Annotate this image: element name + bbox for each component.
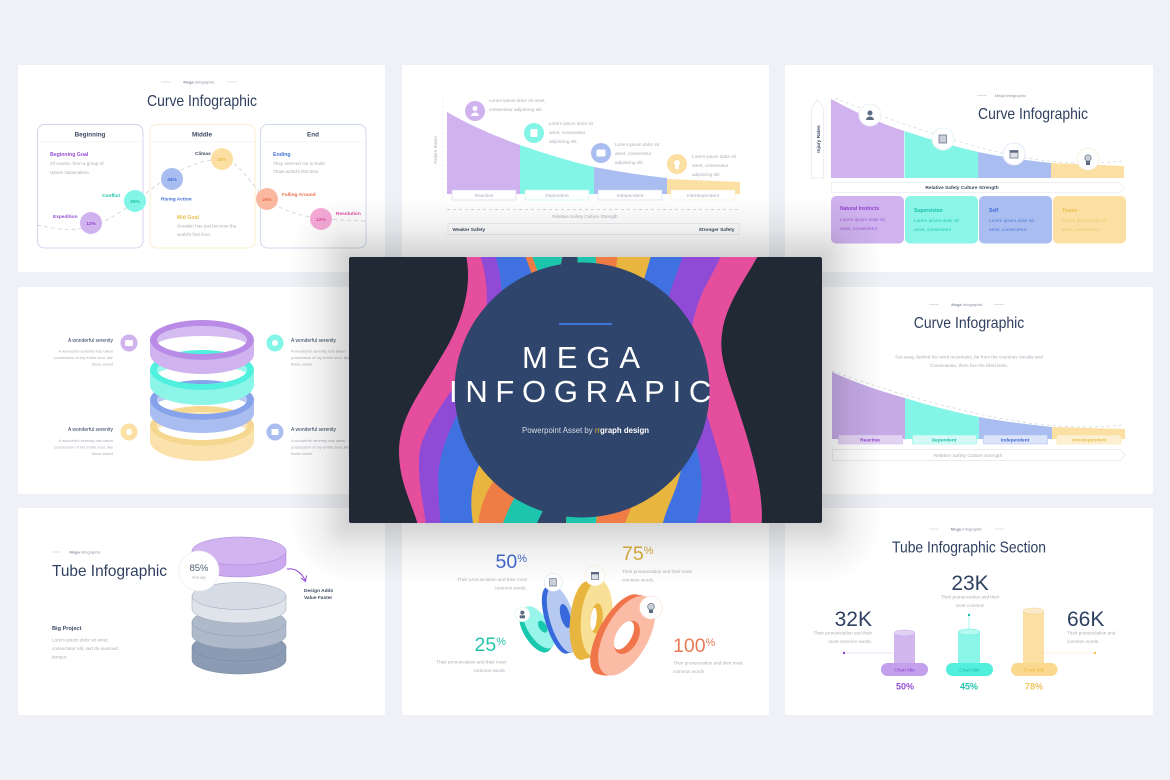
subtitle: Powerpoint Asset by rrgraph design <box>522 426 649 435</box>
pill: purple chart title: Chart title <box>894 668 915 674</box>
dashed trend line <box>832 371 1122 427</box>
curve node: expedition <box>53 212 102 234</box>
stage box: middle: Sondein has just become the <box>177 224 237 228</box>
disk: slate top <box>192 582 286 623</box>
curve node: conflict: Conflict <box>102 193 120 199</box>
disk: slate middle <box>192 608 286 649</box>
stat: 50 percent: common words. <box>495 586 527 590</box>
callout: 85 percent <box>179 551 219 591</box>
card: supervision: Supervision <box>914 208 943 214</box>
curve node: rising action <box>161 168 192 202</box>
y axis <box>433 97 443 198</box>
icon: person <box>465 101 485 121</box>
callout: top right: A wonderful serenity <box>291 338 337 344</box>
callout texts: amet, consectetur <box>615 151 652 156</box>
percentages: 78% <box>1025 682 1043 692</box>
callout: top right: A wonderful serenity has taken <box>291 348 345 354</box>
flowing color ribbons <box>399 257 762 523</box>
area segments <box>832 372 1125 439</box>
text block: big project <box>52 626 118 660</box>
stage box: beginning: Ubiom Nationalism. <box>50 170 90 175</box>
callout texts: adipiscing elit. <box>692 172 721 177</box>
card: natural instincts: Natural Instincts <box>840 206 879 212</box>
curve node: falling around: 26% <box>262 197 273 203</box>
icon: calendar <box>1003 143 1025 165</box>
heading: INFOGRAPIC <box>449 374 719 409</box>
disk: slate bottom <box>192 633 286 674</box>
heading: MEGA <box>522 340 649 375</box>
stage box: end: Ending <box>273 152 291 158</box>
icon: document badge <box>544 573 562 591</box>
card: natural instincts: Lorem ipsum dolor sit <box>840 217 886 222</box>
icon: calendar badge <box>585 566 605 586</box>
stat: 66K <box>1067 608 1116 644</box>
title: Curve Infographic <box>147 93 257 110</box>
eyebrow label: Mega Infographic <box>995 93 1026 98</box>
callout: bottom left <box>54 424 138 456</box>
stat: 50 percent <box>457 551 528 590</box>
title: Curve Infographic <box>978 106 1088 123</box>
callout: top right: these sweet <box>291 362 313 366</box>
stat: 66K: Their pronunciation and <box>1067 630 1116 636</box>
stage labels <box>452 190 735 200</box>
percentages: 45% <box>960 682 978 692</box>
stage labels: Independent <box>1001 438 1030 444</box>
tube: purple <box>894 630 915 664</box>
curve node: resolution <box>310 208 361 230</box>
eyebrow label: Mega Infographic <box>70 550 101 554</box>
stat: 66K: 66K <box>1067 608 1104 631</box>
stage box: beginning: Of course, from a group of <box>50 161 104 166</box>
arrow: purple curved <box>287 569 306 582</box>
curve node: conflict: 25% <box>130 199 141 205</box>
stage labels: Independent <box>617 193 644 199</box>
eyebrow label <box>52 550 101 554</box>
curve node: expedition: 12% <box>86 221 97 227</box>
description: Far away, behind the word mountains, far from the countries Vocalia and <box>895 354 1043 360</box>
eyebrow label <box>929 526 1004 532</box>
disc: orange 100 percent <box>579 586 667 685</box>
callout: top left: possession of my entire soul, like <box>54 355 114 360</box>
card: supervision <box>905 196 978 244</box>
label: design adds value faster <box>304 588 333 601</box>
callout: 85 percent: 85% <box>189 563 209 574</box>
callout texts: Lorem ipsum dolor sit amet, <box>489 98 546 103</box>
stat: 75 percent: % <box>644 545 654 557</box>
text block: big project: Lorem ipsum dolor sit amet, <box>52 638 109 642</box>
curve node: climax: Climax <box>195 151 211 157</box>
weaker to stronger scale: Weaker Safety <box>452 227 486 233</box>
stage box: middle <box>150 124 255 248</box>
stat: 23K <box>941 572 1000 608</box>
stat: 50 percent: Their pronunciation and their most <box>457 577 528 582</box>
stat: 25 percent: % <box>496 636 506 648</box>
card: natural instincts <box>831 196 904 244</box>
callout: top right <box>266 334 350 366</box>
weaker to stronger scale <box>448 224 739 234</box>
card: supervision: amet, consectetur <box>914 227 952 232</box>
card: self <box>979 196 1052 244</box>
stage box: end: End <box>307 132 319 138</box>
stat: 25 percent: Their pronunciation and their most <box>436 660 507 664</box>
curve node: climax: 38% <box>217 157 228 163</box>
curve node: resolution: Resolution <box>336 211 361 217</box>
panel: curve infographic with cards <box>785 65 1153 272</box>
callout texts: Lorem ipsum dolor sit <box>692 154 737 159</box>
tube: cyan <box>958 629 980 664</box>
curve node: falling around: Falling Around <box>282 192 316 198</box>
stage labels: Dependent <box>932 438 957 444</box>
panel: stacked rings <box>18 287 385 494</box>
callout: bottom right: possession of my entire soul, like <box>291 444 350 450</box>
stage box: middle: world's first time. <box>177 232 211 237</box>
label: design adds value faster: Design Adds <box>304 588 333 594</box>
callout: bottom left: these sweet <box>92 451 114 456</box>
stat: 100 percent: common words. <box>673 669 705 674</box>
ring: cyan <box>150 350 254 405</box>
stage box: end <box>260 124 366 248</box>
curve node: rising action: 44% <box>167 177 178 183</box>
x axis arrow: Relative Safety Culture Strength <box>552 214 618 219</box>
eyebrow label: Mega Infographic <box>951 302 983 307</box>
icon: calendar <box>591 143 611 163</box>
callout: bottom right: A wonderful serenity <box>291 427 337 433</box>
disc: yellow 75 percent <box>567 578 616 661</box>
ring: purple <box>150 320 254 374</box>
stage box: beginning <box>38 124 143 248</box>
eyebrow label <box>929 302 1004 307</box>
arrow bar <box>832 450 1125 460</box>
arrow bar: Relative Safety Culture Strength <box>934 453 1003 459</box>
stage labels: Reactive <box>475 193 494 199</box>
stage labels <box>838 435 1121 444</box>
text block: big project: tempor. <box>52 654 67 660</box>
dashed story curve <box>37 159 366 229</box>
callout: top left <box>54 334 138 366</box>
stage box: end: They seemed me to build <box>273 161 325 166</box>
accent line <box>559 323 612 325</box>
title: Curve Infographic <box>914 315 1024 332</box>
icon: person <box>859 104 881 126</box>
panel: tube infographic section <box>785 508 1153 715</box>
stat: 32K: Their pronunciation and their <box>814 630 872 636</box>
callout texts: Lorem ipsum dolor sit <box>549 121 594 126</box>
stat: 50 percent: % <box>517 553 527 565</box>
stage box: middle: Mid Goal <box>177 215 199 221</box>
description <box>895 354 1043 368</box>
stat: 25 percent: common words. <box>474 668 506 673</box>
stage labels: Dependent <box>545 193 569 199</box>
weaker to stronger scale: Stronger Safety <box>699 227 735 233</box>
panel: injury rates area chart <box>402 65 769 272</box>
title: Tube Infographic Section <box>892 540 1046 556</box>
vertical arrow label <box>812 100 824 178</box>
stat: 100 percent: % <box>706 637 716 649</box>
stat: 25 percent: 25 <box>475 634 496 656</box>
callout texts: adipiscing elit. <box>615 160 644 165</box>
pill: cyan chart title <box>946 663 993 676</box>
y axis: Failure Rates <box>433 136 438 164</box>
panel: curve infographic with labels <box>785 287 1153 494</box>
card: supervision: Lorem ipsum dolor sit <box>914 218 960 223</box>
pill: yellow chart title <box>1011 663 1058 676</box>
callout texts <box>489 98 737 177</box>
large navy circle <box>454 262 710 518</box>
pill: yellow chart title: Chart title <box>1024 668 1045 674</box>
callout texts: amet, consectetur <box>549 130 586 135</box>
stat: 23K: 23K <box>951 572 989 595</box>
card: self: Lorem ipsum dolor sit <box>989 218 1035 223</box>
stat: 32K: 32K <box>835 608 872 631</box>
pill: purple chart title <box>881 663 928 676</box>
stage box: end: Thats world's first time <box>273 169 319 174</box>
curve node: resolution: 12% <box>316 217 327 223</box>
horizontal arrow bar <box>832 182 1124 192</box>
percentages <box>896 682 1043 692</box>
icon: document <box>932 128 954 150</box>
label: design adds value faster: Value Faster <box>304 595 332 601</box>
area segments <box>447 112 740 194</box>
curve node: falling around <box>256 188 316 210</box>
eyebrow label: Mega Infographic <box>951 526 982 532</box>
title: Tube Infographic <box>52 563 167 580</box>
callout: bottom left: A wonderful serenity has taken <box>59 438 113 443</box>
card: teams <box>1053 196 1126 244</box>
area segments <box>831 99 1124 178</box>
vertical arrow label: Injury Rates <box>816 125 822 153</box>
stage labels: Interdependent <box>687 193 720 199</box>
stat: 23K: most common <box>956 603 985 608</box>
callout: top left: A wonderful serenity has taken <box>59 348 113 354</box>
stage box: beginning: Beginning Goal <box>50 152 89 158</box>
callout texts: Lorem ipsum dolor sit <box>615 142 660 147</box>
discs illustration <box>513 566 667 685</box>
disk: purple lifted <box>192 537 286 577</box>
icon: badge <box>1077 148 1099 170</box>
callout texts: adipiscing elit. <box>549 139 578 144</box>
icon: document <box>524 123 544 143</box>
stage labels: Interdependent <box>1072 438 1107 444</box>
card: teams: amet, consectetur <box>1062 227 1100 232</box>
percentages: 50% <box>896 682 914 692</box>
disc: teal 25 percent <box>513 601 561 658</box>
disc: blue 50 percent <box>536 583 584 657</box>
eyebrow label: Mega Infographic <box>183 80 215 84</box>
stat: 32K: most common words. <box>828 639 872 644</box>
heading <box>449 340 719 409</box>
stat: 100 percent <box>673 635 743 674</box>
callout: top left: these sweet <box>92 362 114 366</box>
stat: 75 percent: Their pronunciation and their most <box>622 569 692 574</box>
card: teams: Teams <box>1062 208 1078 214</box>
stat: 23K: Their pronunciation and their <box>941 594 1000 600</box>
callout: bottom right: these sweet <box>291 451 313 456</box>
eyebrow label <box>977 93 1026 98</box>
stage box: middle: Middle <box>192 132 212 138</box>
stage labels: Reactive <box>860 438 880 444</box>
stat: 100 percent: Their pronunciation and their most <box>673 660 743 666</box>
card: self: amet, consectetur <box>989 227 1027 232</box>
callout: bottom left: A wonderful serenity <box>68 427 113 433</box>
callout: 85 percent: Average <box>192 576 206 580</box>
tube: yellow <box>1023 608 1044 664</box>
leader lines <box>843 614 1096 654</box>
callout: top right: possession of my entire soul, like <box>291 355 350 360</box>
stat: 75 percent: common words. <box>622 578 654 582</box>
curve node: climax <box>195 148 233 170</box>
ring: yellow <box>150 406 254 461</box>
card: teams: Lorem ipsum dolor sit <box>1062 218 1108 223</box>
stat: 66K: common words. <box>1067 639 1099 644</box>
card: self: Self <box>989 208 999 214</box>
ring: blue <box>150 380 254 433</box>
callout texts: consectetur adipiscing elit. <box>489 107 543 112</box>
description: Consonantia, there live the blind texts. <box>930 363 1008 368</box>
shadow of cover slide <box>289 197 882 583</box>
curve node: expedition: Expedition <box>53 214 78 220</box>
panel: cover slide <box>349 257 822 523</box>
callout texts: amet, consectetur <box>692 163 729 168</box>
text block: big project: consectetur elit, sed do eiusmod <box>52 646 118 651</box>
curve node: conflict <box>102 190 146 212</box>
text block: big project: Big Project <box>52 626 82 632</box>
icon: award badge <box>640 596 662 619</box>
panel: curve infographic with three stages <box>18 65 385 272</box>
callout: bottom right: A wonderful serenity has taken <box>291 438 345 443</box>
stat: 75 percent <box>622 543 692 582</box>
callout: bottom left: possession of my entire soul, like <box>54 444 114 450</box>
icon: badge <box>667 154 687 174</box>
horizontal arrow bar: Relative Safety Culture Strength <box>925 185 999 191</box>
stat: 100 percent: 100 <box>673 635 706 657</box>
stage box: beginning: Beginning <box>75 132 106 138</box>
callout: bottom right <box>266 424 350 456</box>
icon: person badge <box>515 607 530 622</box>
stat: 32K <box>814 608 872 644</box>
panel: tube infographic stacked disks <box>18 508 385 715</box>
dashed trend line <box>835 98 1122 163</box>
stat: 25 percent <box>436 634 507 673</box>
stat: 75 percent: 75 <box>622 543 644 565</box>
panel: percentage discs <box>402 508 769 715</box>
curve node: rising action: Rising Action <box>161 196 192 202</box>
card: natural instincts: amet, consectetur <box>840 226 878 231</box>
callout: top left: A wonderful serenity <box>68 338 113 344</box>
stat: 50 percent: 50 <box>496 551 517 573</box>
pill: cyan chart title: Chart title <box>959 668 980 674</box>
